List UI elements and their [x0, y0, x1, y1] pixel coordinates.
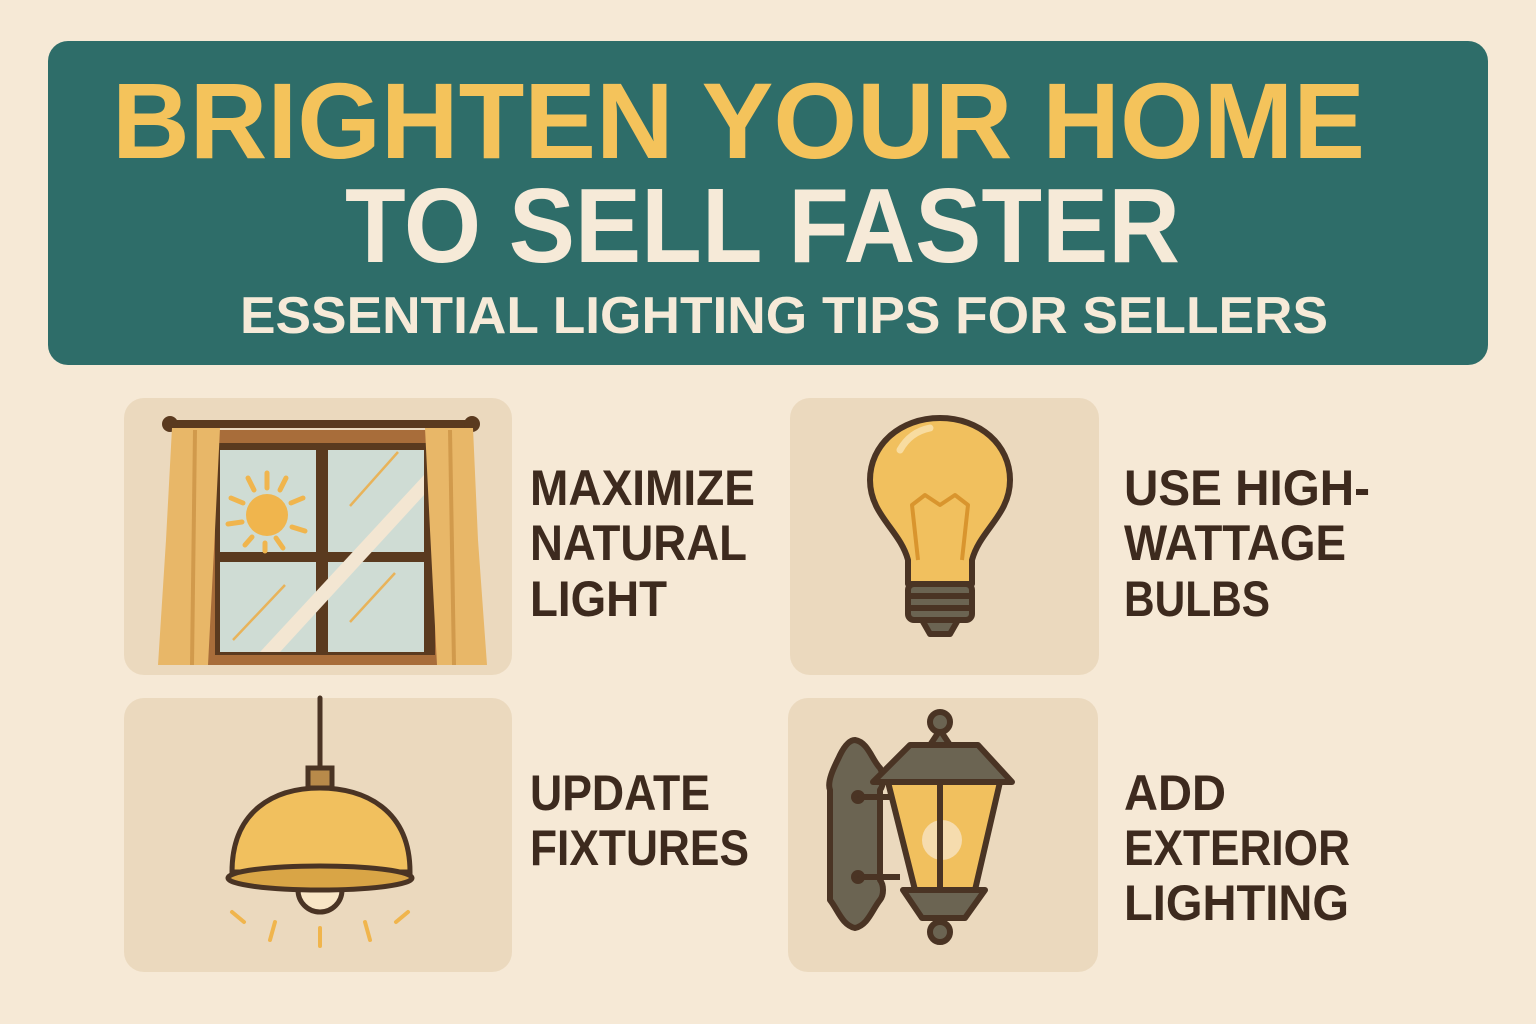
icon: pendant lamp — [228, 698, 412, 946]
label: add exterior lighting: ADD — [1124, 765, 1226, 821]
label: maximize natural light: MAXIMIZE — [530, 460, 755, 516]
label: add exterior lighting: EXTERIOR — [1124, 820, 1350, 876]
label: add exterior lighting: LIGHTING — [1124, 875, 1349, 931]
panel: natural light — [124, 398, 512, 675]
label: update fixtures: UPDATE — [530, 765, 710, 821]
label: maximize natural light: LIGHT — [530, 571, 667, 627]
label: high wattage bulbs: USE HIGH- — [1124, 460, 1370, 516]
panel: fixtures — [124, 698, 512, 972]
label: high wattage bulbs — [1124, 460, 1370, 627]
title line 1: BRIGHTEN YOUR HOME — [112, 60, 1365, 181]
icon: light bulb — [870, 418, 1010, 634]
header banner — [48, 41, 1488, 365]
panel: exterior — [788, 698, 1098, 972]
label: high wattage bulbs: WATTAGE — [1124, 515, 1346, 571]
label: add exterior lighting — [1124, 765, 1350, 931]
icon: wall lantern — [829, 712, 1012, 942]
icon: window — [158, 416, 487, 665]
label: maximize natural light: NATURAL — [530, 515, 747, 571]
label: maximize natural light — [530, 460, 755, 627]
title line 2: TO SELL FASTER — [345, 167, 1180, 285]
label: update fixtures — [530, 765, 749, 876]
label: update fixtures: FIXTURES — [530, 820, 749, 876]
subtitle: ESSENTIAL LIGHTING TIPS FOR SELLERS — [240, 287, 1328, 345]
panel: bulbs — [790, 398, 1099, 675]
label: high wattage bulbs: BULBS — [1124, 571, 1270, 627]
